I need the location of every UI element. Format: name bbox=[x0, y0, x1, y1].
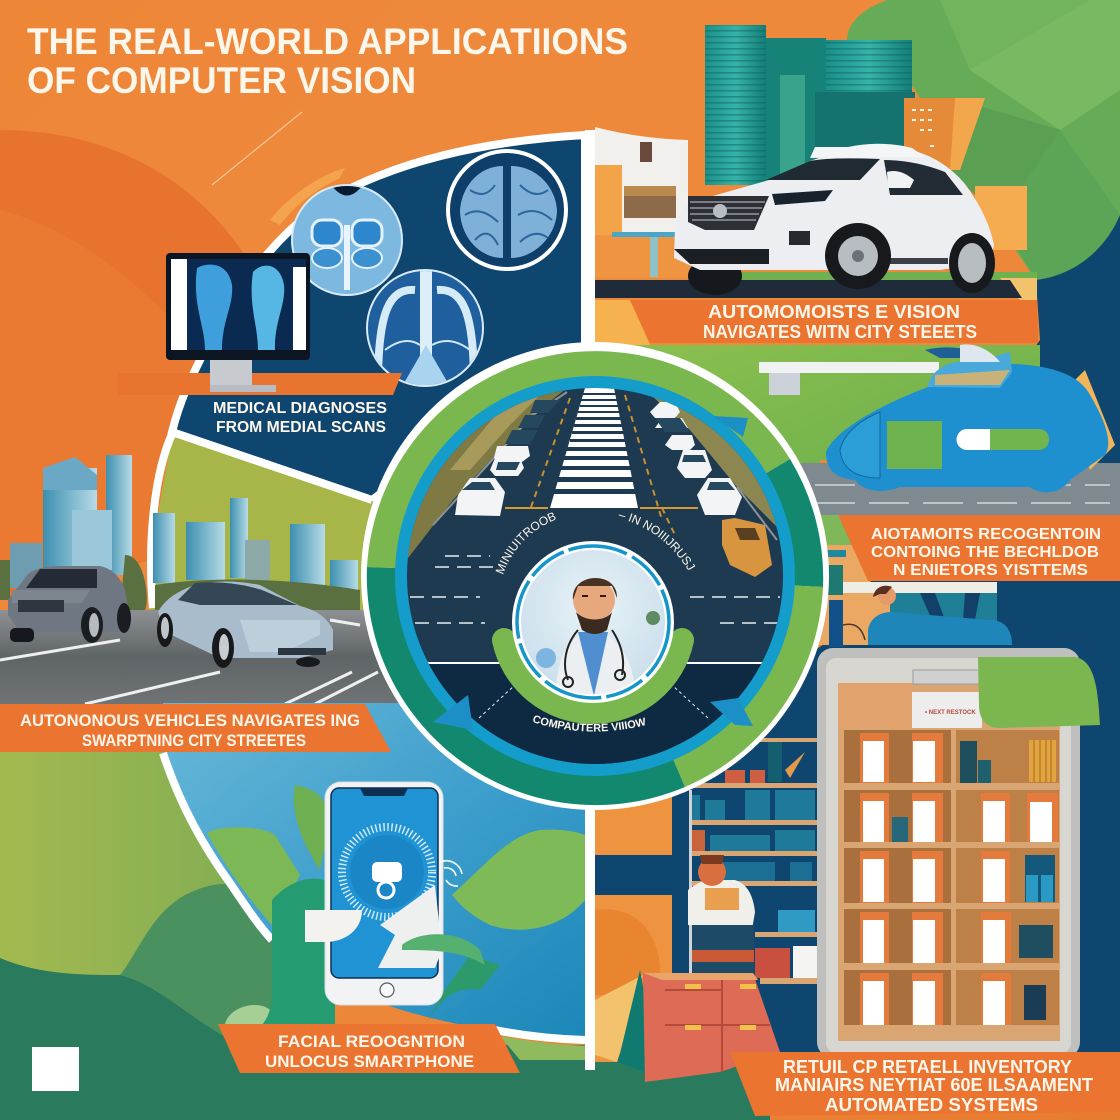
tablet frame bbox=[817, 648, 1080, 1058]
icon: monitor bbox=[166, 253, 310, 392]
shelf cells bbox=[844, 730, 1059, 1025]
panel: retail inventory bbox=[595, 648, 1120, 1116]
icon: white SUV bbox=[674, 144, 995, 295]
hand bbox=[262, 879, 335, 1025]
road bbox=[0, 610, 420, 704]
buildings bbox=[705, 25, 985, 185]
icon: sinus scan bbox=[292, 185, 402, 295]
crosswalk bbox=[550, 388, 640, 508]
title bbox=[27, 21, 628, 101]
panel: autonomous vehicle bbox=[595, 25, 1038, 345]
store shelves bbox=[689, 680, 817, 985]
road labels bbox=[496, 512, 696, 574]
fingers bbox=[305, 910, 362, 942]
panel: medical diagnoses bbox=[118, 135, 585, 500]
icon: silver sedan bbox=[157, 582, 333, 668]
icon: brain scan bbox=[448, 151, 566, 269]
title: THE REAL-WORLD APPLICATIIONS bbox=[27, 21, 628, 62]
traffic cars bbox=[455, 402, 742, 516]
panel: facial recognition bbox=[163, 703, 590, 1073]
orange shelf bar bbox=[118, 373, 402, 395]
leaves bbox=[207, 785, 585, 930]
recognition label: AIOTAMOITS RECOGENTOIN bbox=[871, 526, 1101, 543]
icon: smartphone bbox=[325, 782, 462, 1005]
center caption: COMPAUTERE VIIIOW bbox=[533, 716, 645, 732]
autonomous vehicles label: SWARPTNING CITY STREETES bbox=[82, 731, 306, 750]
technician scene bbox=[818, 515, 1012, 647]
icon: doctor bbox=[536, 578, 660, 696]
retail label: AUTOMATED SYSTEMS bbox=[825, 1095, 1038, 1115]
retail label: RETUIL CP RETAELL INVENTORY bbox=[783, 1057, 1072, 1077]
backdrop shapes bbox=[595, 790, 672, 1078]
icon: grey SUV bbox=[8, 566, 131, 643]
autonomous vision label bbox=[630, 300, 1038, 343]
road labels: – IN NOIIIJRUSJ bbox=[618, 513, 696, 570]
road labels: MINIUITROOB bbox=[496, 512, 556, 574]
recognition label: CONTOING THE BECHLDOB bbox=[871, 544, 1099, 561]
shopkeeper bbox=[688, 855, 755, 973]
tablet frame: • NEXT RESTOCK bbox=[925, 710, 976, 716]
doctor badge bbox=[504, 541, 682, 712]
shelf products bbox=[892, 740, 1056, 1020]
panel: robot vehicle bbox=[595, 344, 1120, 647]
product cards bbox=[860, 733, 1058, 1025]
road strip bbox=[700, 272, 1037, 282]
facial recognition label bbox=[218, 1024, 520, 1073]
heading: medical label: MEDICAL DIAGNOSES bbox=[213, 400, 387, 417]
road dashes bbox=[410, 556, 780, 623]
billboard bbox=[595, 127, 690, 278]
dashed sensor lines bbox=[479, 685, 708, 718]
heading: medical label bbox=[213, 400, 387, 436]
ring segments bbox=[367, 351, 823, 805]
road barrier bbox=[759, 362, 939, 395]
autonomous vehicles label bbox=[0, 704, 391, 752]
icon: blue vehicle bbox=[826, 344, 1115, 492]
arrows bbox=[433, 416, 753, 730]
autonomous vision label: NAVIGATES WITN CITY STEEETS bbox=[703, 322, 977, 342]
title: OF COMPUTER VISION bbox=[27, 60, 416, 101]
recognition label: N ENIETORS YISTTEMS bbox=[893, 562, 1088, 579]
white square badge bbox=[32, 1047, 79, 1091]
retail label bbox=[730, 1052, 1120, 1116]
autonomous vision label: AUTOMOMOISTS E VISION bbox=[708, 302, 960, 322]
top-right green leaf bbox=[847, 0, 1120, 280]
facial recognition label: UNLOCUS SMARTPHONE bbox=[265, 1052, 474, 1071]
recognition label bbox=[838, 515, 1120, 581]
orange wreck car bbox=[722, 518, 772, 577]
green tab bbox=[978, 657, 1100, 728]
retail label: MANIAIRS NEYTIAT 60E ILSAAMENT bbox=[775, 1075, 1093, 1095]
central circle bbox=[361, 342, 829, 810]
heading: medical label: FROM MEDIAL SCANS bbox=[216, 419, 386, 436]
city skyline bbox=[0, 455, 360, 610]
icon: chest x-ray bbox=[367, 270, 483, 390]
panel: city streets bbox=[0, 432, 420, 704]
road scene bbox=[408, 388, 780, 764]
autonomous vehicles label: AUTONONOUS VEHICLES NAVIGATES ING bbox=[20, 711, 360, 730]
red drawers bbox=[643, 973, 780, 1082]
facial recognition label: FACIAL REOOGNTION bbox=[278, 1032, 465, 1051]
divider bbox=[585, 130, 595, 1070]
navy right backdrop bbox=[595, 215, 1120, 1060]
